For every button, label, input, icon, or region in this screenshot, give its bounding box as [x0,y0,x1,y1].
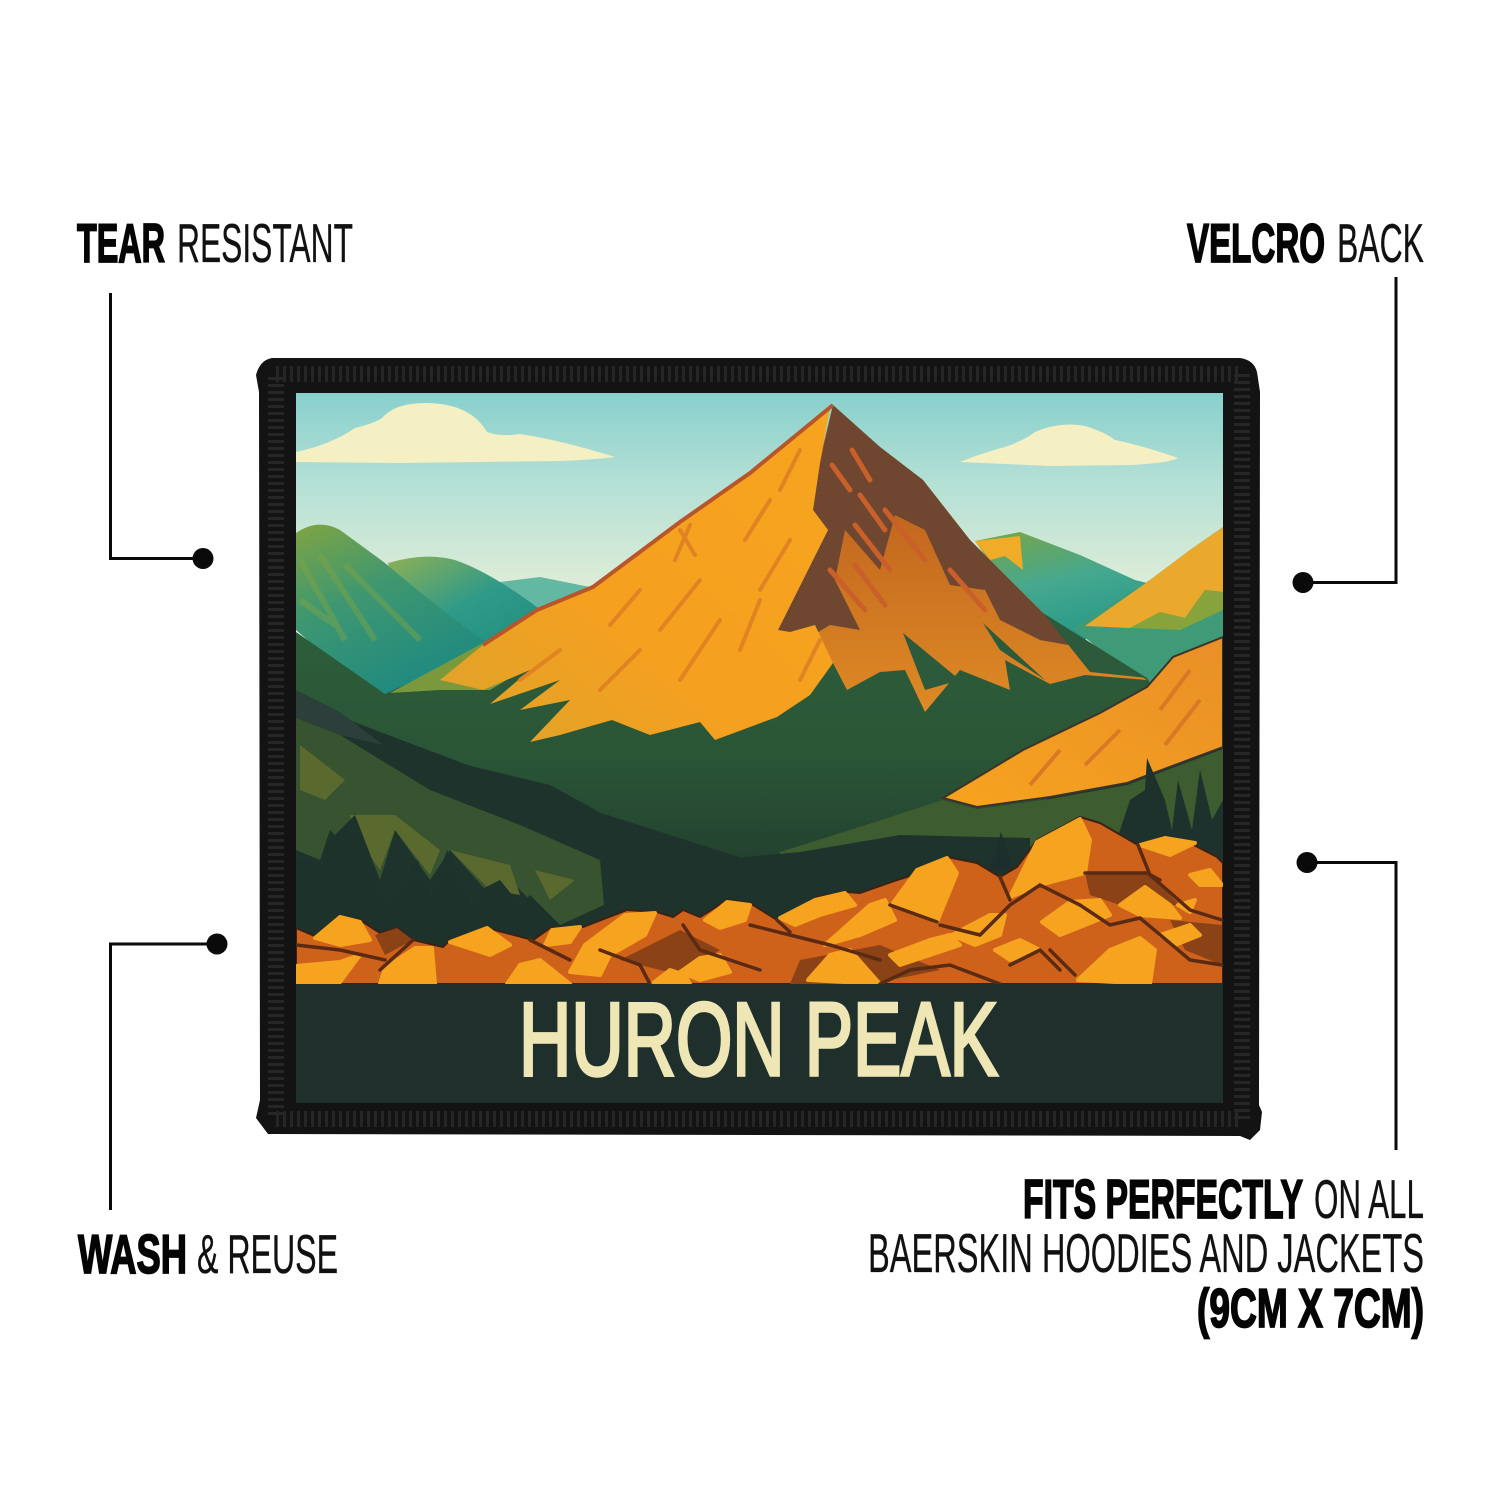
rock crack lines [296,845,1222,984]
first left hill [296,525,490,696]
upper left haze [296,690,383,745]
art base [352,722,1223,862]
dark green spikes on right face [903,613,1147,690]
label: velcro back: BACK [1337,212,1424,274]
callout: fit and size [868,852,1424,1339]
left trees [335,815,560,925]
right lower hillside [780,749,1223,854]
peak ridge outline [483,405,833,645]
rock lit faces [296,819,1222,984]
right teal hill [975,532,1155,640]
patch name: HURON PEAK [519,982,998,1098]
right trees [1119,758,1223,862]
peak of right hill in yellow [975,536,1023,570]
leader line with dot: tear resistant [110,293,214,569]
label: wash and reuse [78,1223,338,1285]
lowest right mountain [943,637,1223,807]
label: tear resistant [77,212,353,274]
embroidered patch [256,358,1262,1140]
leader line with dot: velcro back [1292,277,1396,593]
right hill base [1073,527,1223,690]
olive foothill strip [390,644,508,693]
callout: wash and reuse [78,934,338,1285]
orange streaks on lit face [520,450,820,690]
orange streaks on right face [830,450,985,610]
cloud left [296,403,615,463]
left olive forest patches [300,745,575,900]
green mountain base [296,629,1150,858]
label: fit and size: FITS PERFECTLY [1023,1168,1303,1230]
label: fit and size [868,1168,1424,1339]
label: tear resistant: TEAR [77,212,165,274]
right mountain streaks [1030,670,1200,785]
leader line with dot: fit and size [1296,852,1396,1150]
patch artwork [296,393,1223,1103]
cloud right [960,424,1178,466]
central forest shadow [470,766,1030,900]
right hill yellow face [1085,527,1223,628]
hill light streaks [300,555,420,640]
patch border [256,358,1262,1140]
leader line with dot: wash and reuse [110,934,228,1210]
label: velcro back: VELCRO [1187,212,1325,274]
callout: tear resistant [77,212,353,569]
rock pile [296,817,1223,984]
left green forest [296,718,604,925]
far teal hill [500,577,588,608]
label: wash and reuse: & REUSE [197,1223,338,1285]
label: wash and reuse: WASH [78,1223,187,1285]
sky [296,393,1223,646]
right hill olive transition [1130,590,1223,630]
main peak right face [778,405,1147,712]
border stitching [276,374,1242,1119]
label: tear resistant: RESISTANT [177,212,353,274]
name banner [296,984,1223,986]
callout: velcro back [1187,212,1424,593]
second left hill [388,556,538,642]
rock base [296,817,1223,984]
small centre tree [1000,832,1003,838]
rock shadow patches [375,873,1222,984]
brown shadow on right face [778,405,1085,648]
main peak lit left face [440,407,833,742]
